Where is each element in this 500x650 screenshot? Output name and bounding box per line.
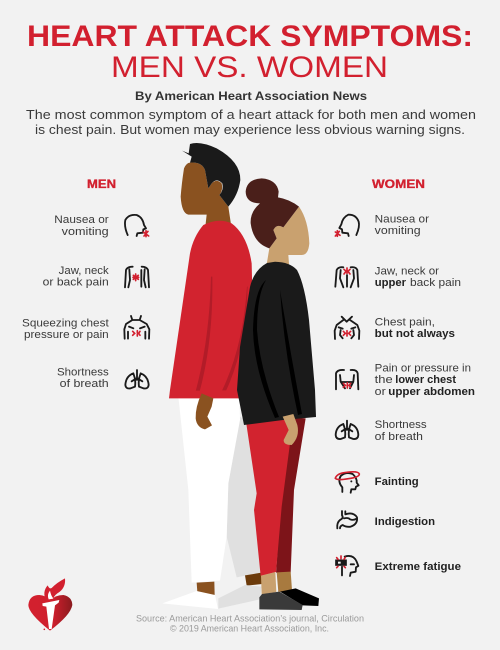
symptom: pain or pressure in the lower chest or upper abdomen: the (375, 374, 393, 386)
symptom: shortness of breath: of breath (60, 378, 109, 390)
symptom: nausea or vomiting (335, 214, 429, 237)
icon: head with vomit (125, 215, 149, 237)
symptom: nausea or vomiting (54, 214, 149, 238)
symptom: shortness of breath: Shortness (57, 367, 109, 379)
symptom: squeezing chest pressure or pain (22, 316, 149, 341)
symptom: nausea or vomiting: Nausea or (54, 214, 109, 226)
woman's head and hair (246, 178, 309, 268)
icon: torso with chest pain (124, 316, 149, 339)
symptom: pain or pressure in the lower chest or upper abdomen: or (375, 386, 386, 398)
intro text: is chest pain. But women may experience less obvious warning signs. (35, 122, 465, 137)
icon: back with pain marks (125, 267, 149, 287)
icon: torso with lower chest pain (336, 370, 358, 389)
symptom: jaw, neck or upper back pain: back pain (410, 277, 461, 289)
symptom: pain or pressure in the lower chest or upper abdomen: upper abdomen (388, 386, 475, 398)
icon: stomach (337, 511, 357, 528)
symptom: pain or pressure in the lower chest or upper abdomen (336, 363, 475, 398)
symptom: extreme fatigue: Extreme fatigue (375, 561, 461, 573)
icon: head with vomit (335, 215, 359, 236)
title: HEART ATTACK SYMPTOMS: (27, 20, 473, 53)
heading: women: WOMEN (372, 179, 425, 191)
symptom: shortness of breath: of breath (375, 431, 423, 443)
symptom: fainting: Fainting (375, 476, 419, 488)
symptom: squeezing chest pressure or pain: Squeezing chest (22, 318, 110, 330)
symptom: jaw, neck or back pain: or back pain (43, 277, 109, 289)
illustration: man and woman standing back to back (162, 143, 319, 610)
symptom: shortness of breath (336, 419, 427, 443)
symptom: chest pain, but not always: Chest pain, (375, 317, 435, 329)
symptom: chest pain, but not always (335, 317, 455, 340)
sweater folds (253, 280, 302, 418)
logo: American Heart Association heart and torch (28, 578, 72, 631)
symptom: extreme fatigue (336, 556, 461, 576)
intro text: The most common symptom of a heart attack for both men and women (26, 107, 476, 122)
symptom: squeezing chest pressure or pain: pressure or pain (24, 329, 109, 341)
title: MEN VS. WOMEN (111, 51, 388, 84)
symptom: pain or pressure in the lower chest or upper abdomen: Pain or pressure in (375, 363, 471, 375)
icon: head with dizzy ring (335, 472, 359, 493)
symptom: shortness of breath: Shortness (375, 419, 427, 431)
symptom: indigestion: Indigestion (375, 516, 435, 528)
heading: men: MEN (87, 179, 116, 191)
symptom: jaw, neck or back pain (43, 265, 149, 289)
symptom: nausea or vomiting: vomiting (375, 225, 421, 237)
woman's legs and shoes (246, 417, 319, 610)
woman's sweater (237, 262, 316, 425)
symptom: jaw, neck or upper back pain: upper (375, 277, 407, 289)
symptom: pain or pressure in the lower chest or upper abdomen: lower chest (395, 374, 456, 386)
symptom: indigestion (337, 511, 435, 528)
woman's hand (283, 414, 298, 445)
symptom: chest pain, but not always: but not always (375, 328, 455, 340)
icon: back with upper pain marks (335, 267, 358, 287)
title (27, 20, 473, 84)
byline: By American Heart Association News (135, 89, 367, 103)
symptom: shortness of breath (57, 367, 149, 390)
symptom: jaw, neck or upper back pain: Jaw, neck or (375, 266, 439, 278)
symptom: nausea or vomiting: vomiting (62, 226, 109, 238)
symptom: jaw, neck or back pain: Jaw, neck (59, 265, 109, 277)
women's symptoms (335, 214, 475, 576)
man's legs and shoes (162, 397, 262, 609)
symptom: nausea or vomiting: Nausea or (375, 214, 429, 226)
source and copyright: Source: American Heart Association’s journal, Circulation (136, 614, 364, 624)
source and copyright: © 2019 American Heart Association, Inc. (170, 624, 329, 634)
icon: lungs (125, 370, 149, 389)
source and copyright (136, 614, 364, 634)
symptom: fainting (335, 472, 419, 493)
icon: head with low battery (336, 556, 358, 576)
men's symptoms (22, 214, 149, 390)
man's upper body (169, 143, 253, 398)
man's hand (196, 393, 213, 429)
intro text (26, 107, 476, 137)
symptom: jaw, neck or upper back pain (335, 266, 461, 289)
icon: lungs (336, 421, 358, 439)
icon: torso with chest pain (335, 317, 359, 339)
